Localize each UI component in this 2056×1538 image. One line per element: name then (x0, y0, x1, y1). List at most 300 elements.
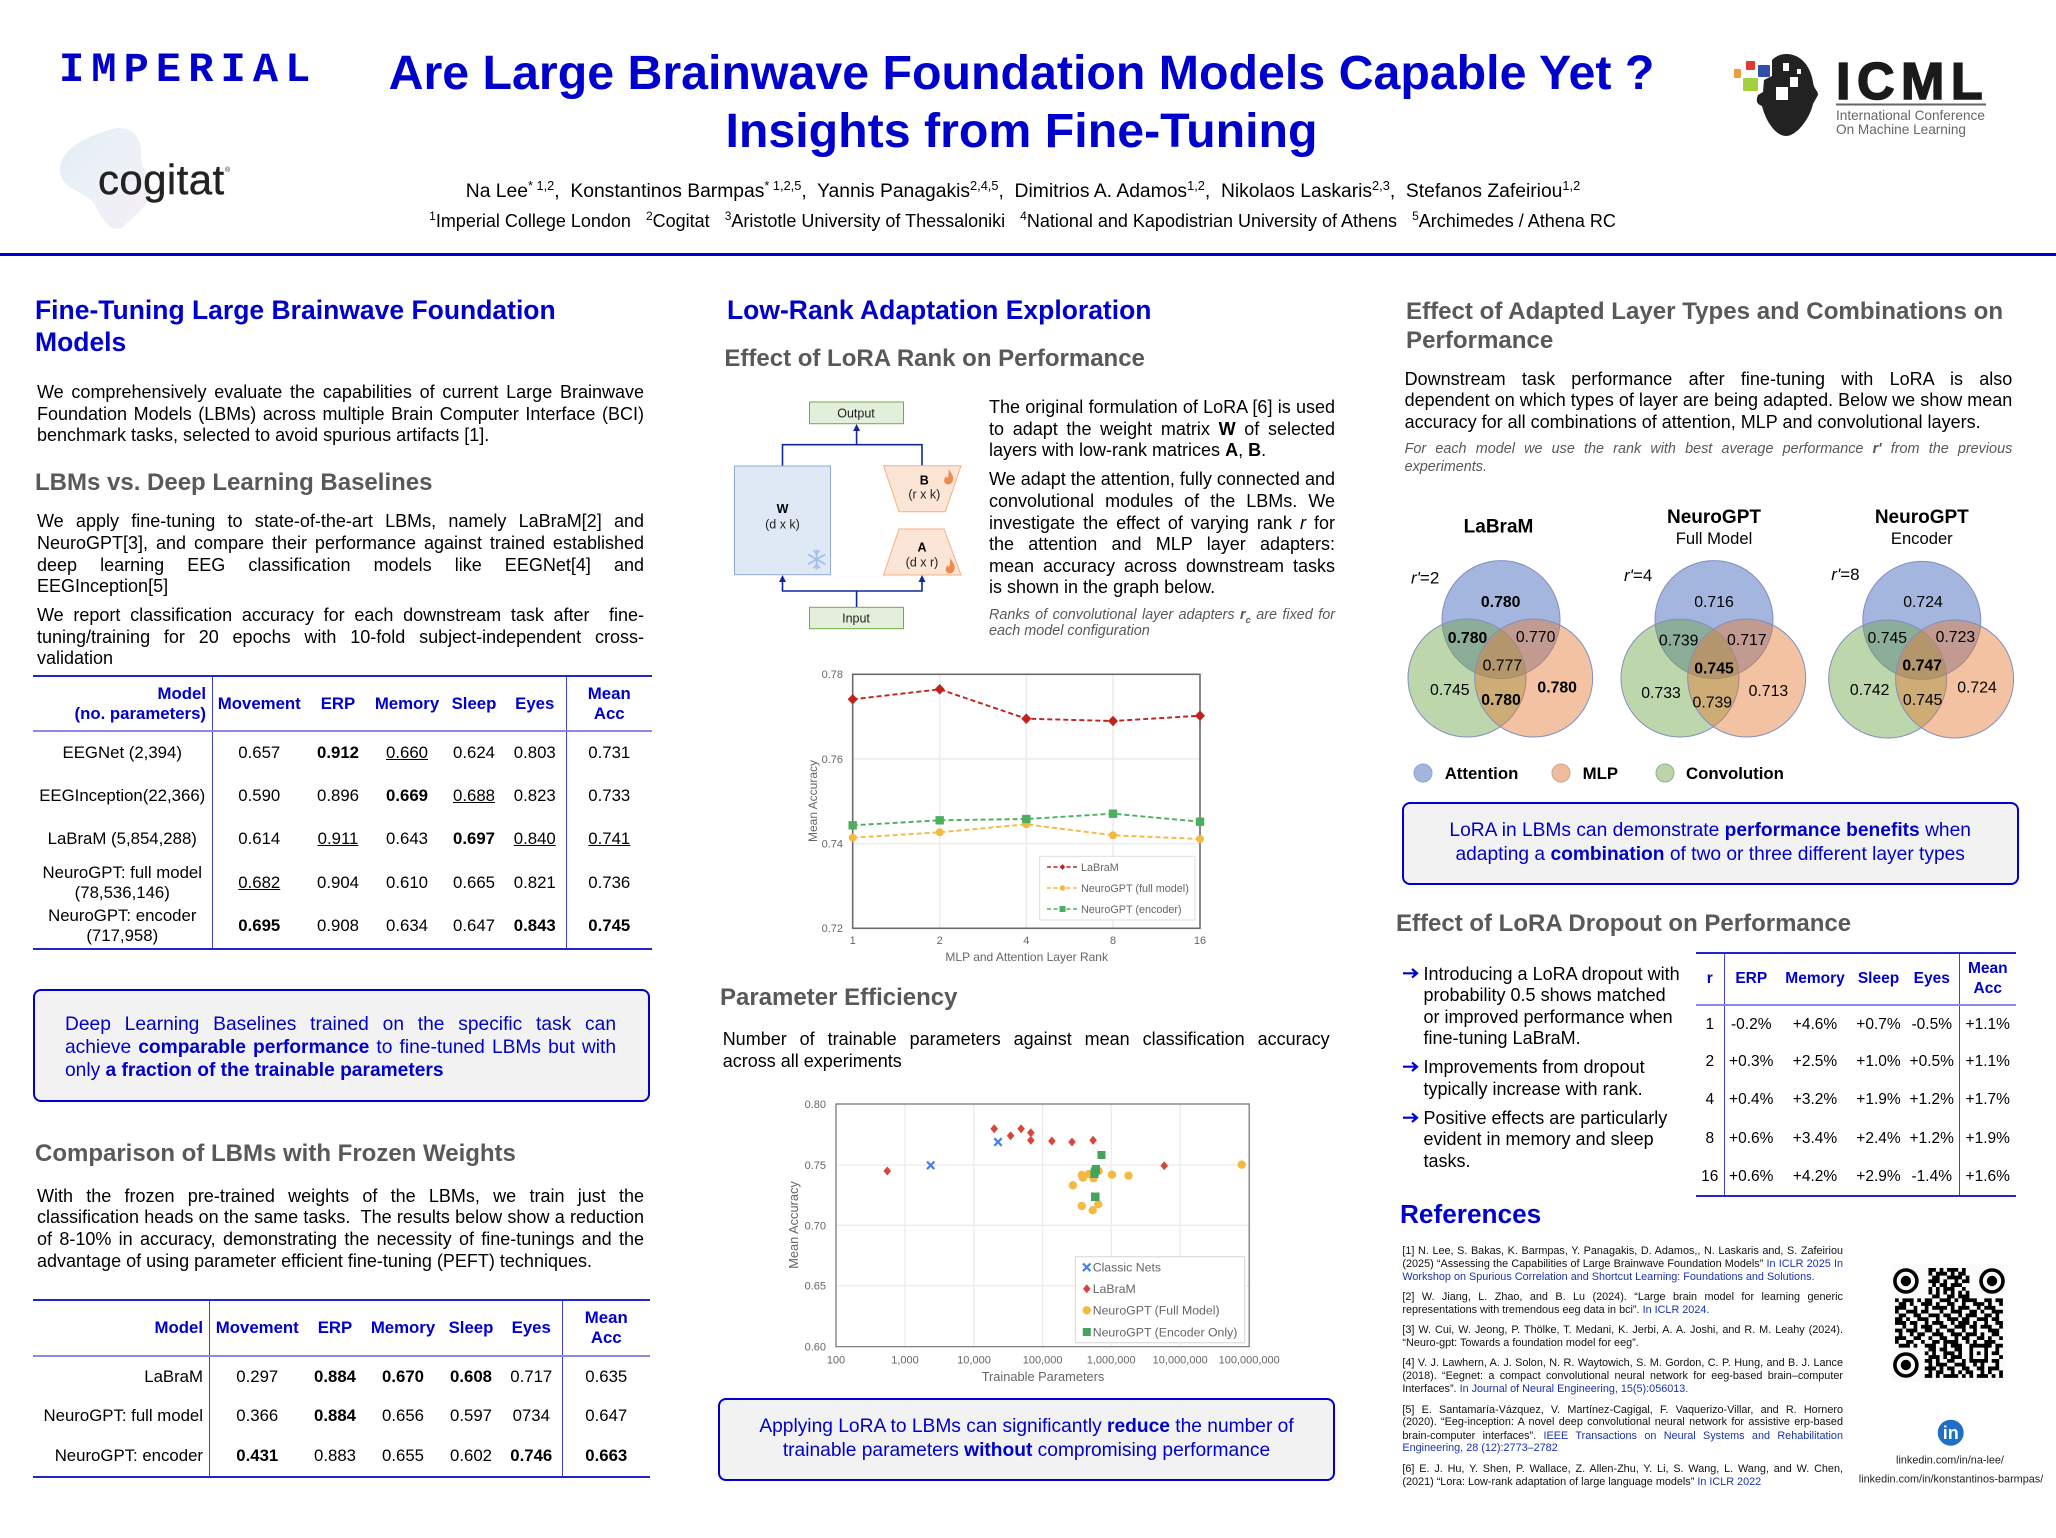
table: frozen weights: Mean (585, 1308, 628, 1327)
table: frozen weights: 0.884 (314, 1406, 356, 1425)
references list: representations with tremendous eeg data in bci”. In ICLR 2024. (1402, 1304, 1709, 1316)
callout: baselines: achieve comparable performance to fine-tuned LBMs but with (65, 1037, 616, 1058)
table: LBMs vs baselines: 0.697 (453, 829, 495, 848)
table: dropout: Sleep (1858, 970, 1899, 987)
table: frozen weights: 0.366 (236, 1406, 278, 1425)
line chart: rank vs accuracy: 2 (937, 935, 943, 947)
venn: LaBraM: 0.780 (1481, 692, 1521, 709)
scatter chart: parameters vs accuracy: 0.80 (805, 1099, 826, 1111)
heading: layer types (1406, 298, 2003, 354)
text: layer types (1405, 369, 2012, 432)
list: dropout findings: Introducing a LoRA dropout with (1424, 964, 1680, 984)
table: LBMs vs baselines: ERP (321, 694, 355, 712)
line chart: rank vs accuracy: 0.78 (822, 669, 843, 681)
text: parameter efficiency (723, 1029, 1330, 1071)
table: frozen weights: Acc (591, 1328, 622, 1347)
heading: fine-tuning section (35, 295, 556, 357)
table: dropout: +3.4% (1793, 1130, 1837, 1147)
table: frozen weights: 0.431 (236, 1446, 278, 1465)
venn legend: Attention (1445, 764, 1518, 783)
table: LBMs vs baselines: NeuroGPT: full model (42, 863, 202, 882)
logo: Cogitat: ® (225, 166, 231, 174)
text: parameter efficiency: across all experiments (723, 1051, 902, 1071)
table: dropout: +0.6% (1729, 1130, 1773, 1147)
heading: fine-tuning section: Models (35, 327, 126, 357)
references list: Workshop on Spurious Correlation and Shortcut Learning: Foundations and Solutions. (1402, 1271, 1815, 1283)
table: LBMs vs baselines: 0.745 (588, 916, 630, 935)
venn: NeuroGPT full model: NeuroGPT (1667, 507, 1761, 528)
table: frozen weights: 0.717 (510, 1367, 552, 1386)
icon: LinkedIn (1938, 1420, 1964, 1446)
scatter chart: parameters vs accuracy: LaBraM (1093, 1282, 1136, 1296)
table: LBMs vs baselines: 0.665 (453, 873, 495, 892)
table: frozen weights: Memory (371, 1318, 435, 1337)
table: frozen weights: NeuroGPT: encoder (55, 1446, 203, 1465)
scatter chart: parameters vs accuracy: 100 (827, 1354, 845, 1366)
logo: ICML: ICML (1836, 53, 1989, 111)
text: fine-tuning description: EEGInception[5] (37, 576, 168, 596)
note: convolutional ranks (989, 607, 1336, 639)
diagram: LoRA architecture: B (920, 474, 929, 488)
diagram: LoRA architecture: (d x k) (765, 518, 800, 532)
text: layer types: Downstream task performance after fine-tuning with LoRA is also (1405, 369, 2012, 389)
heading: fine-tuning section: Fine-Tuning Large Brainwave Foundation (35, 295, 556, 325)
table: dropout: -0.2% (1731, 1016, 1772, 1033)
scatter chart: parameters vs accuracy: 0.65 (805, 1281, 826, 1293)
venn: LaBraM: 0.777 (1483, 658, 1522, 675)
line chart: rank vs accuracy: 16 (1194, 935, 1206, 947)
table: frozen weights: 0.883 (314, 1446, 356, 1465)
table: frozen weights: 0.597 (450, 1406, 492, 1425)
list: dropout findings: fine-tuning LaBraM. (1424, 1028, 1581, 1048)
table: dropout: +1.2% (1910, 1091, 1954, 1108)
venn: NeuroGPT encoder: 0.723 (1936, 629, 1975, 646)
scatter chart: parameters vs accuracy: 10,000 (957, 1354, 991, 1366)
table: LBMs vs baselines: 0.843 (514, 916, 556, 935)
table: frozen weights: 0734 (513, 1406, 550, 1425)
table: dropout: +0.4% (1729, 1091, 1773, 1108)
table: frozen weights: LaBraM (144, 1367, 203, 1386)
table: dropout: +2.9% (1856, 1168, 1901, 1185)
table: LBMs vs baselines: (no. parameters) (74, 704, 206, 722)
callout: baselines: Deep Learning Baselines trained on the specific task can (65, 1014, 616, 1035)
table: frozen weights: 0.297 (236, 1367, 278, 1386)
table: dropout: +0.3% (1729, 1053, 1773, 1070)
diagram: LoRA architecture: W (777, 502, 789, 516)
text: fine-tuning description: deep learning EEG classification models like EEGNet[4] and (37, 555, 644, 575)
logo: Cogitat: cogitat (98, 156, 225, 203)
table: LBMs vs baselines: (717,958) (86, 926, 158, 945)
note: rank r': experiments. (1405, 459, 1487, 475)
venn: LaBraM: 0.780 (1481, 594, 1521, 611)
heading: dropout: Effect of LoRA Dropout on Performance (1396, 910, 1851, 937)
table: LBMs vs baselines: EEGNet (2,394) (63, 743, 182, 762)
references list: brain-computer interfaces”. IEEE Transactions on Neural Systems and Rehabilitation (1402, 1430, 1843, 1442)
text: LoRA description: mean accuracy across downstream tasks (989, 556, 1335, 576)
table: dropout: -1.4% (1912, 1168, 1952, 1185)
table: LBMs vs baselines: (78,536,146) (75, 883, 170, 902)
table: dropout: 4 (1705, 1091, 1714, 1108)
table: LBMs vs baselines: 0.643 (386, 829, 428, 848)
line chart: rank vs accuracy: Mean Accuracy (806, 760, 820, 842)
table: LBMs vs baselines: 0.682 (238, 873, 280, 892)
callout: LoRA reduces parameters: Applying LoRA to LBMs can significantly reduce the number of (759, 1416, 1294, 1437)
table: LBMs vs baselines: Model (158, 684, 206, 702)
LinkedIn links: linkedin.com/in/na-lee/ (1896, 1454, 2005, 1466)
table: dropout: +0.7% (1856, 1016, 1901, 1033)
scatter chart: parameters vs accuracy: 10,000,000 (1153, 1354, 1208, 1366)
heading: low-rank adaptation: Low-Rank Adaptation Exploration (727, 295, 1152, 325)
table: frozen weights: Sleep (449, 1318, 493, 1337)
table: dropout: +0.6% (1729, 1168, 1773, 1185)
callout: combination benefits: LoRA in LBMs can demonstrate performance benefits when (1449, 820, 1971, 841)
venn: LaBraM: 0.745 (1430, 682, 1470, 699)
table: LBMs vs baselines: NeuroGPT: encoder (48, 906, 196, 925)
callout: LoRA reduces parameters (718, 1398, 1335, 1481)
venn: NeuroGPT encoder (1829, 507, 2014, 738)
venn: NeuroGPT encoder: 0.745 (1868, 630, 1907, 647)
list: dropout findings: or improved performance when (1424, 1007, 1673, 1027)
table: frozen weights: 0.647 (585, 1406, 627, 1425)
table: dropout: +1.1% (1966, 1016, 2010, 1033)
note: rank r' (1405, 441, 2012, 475)
references list: (2018). “Eegnet: a compact convolutional neural network for eeg-based brain–computer (1402, 1370, 1843, 1382)
scatter chart: parameters vs accuracy: 1,000 (891, 1354, 919, 1366)
text: LoRA description: We adapt the attention, fully connected and (989, 469, 1335, 489)
QR code (1892, 1264, 2007, 1382)
logo: ICML: On Machine Learning (1836, 122, 1966, 137)
table: dropout: Mean (1968, 960, 2008, 977)
venn: NeuroGPT encoder: 0.745 (1903, 692, 1943, 709)
table: LBMs vs baselines: 0.660 (386, 743, 428, 762)
text: fine-tuning description: We apply fine-tuning to state-of-the-art LBMs, namely LaBraM[2] and (37, 511, 644, 531)
table: frozen weights: 0.670 (382, 1367, 424, 1386)
table: dropout: +1.7% (1966, 1091, 2010, 1108)
list: dropout findings: tasks. (1424, 1151, 1471, 1171)
text: intro (37, 382, 644, 445)
table: LBMs vs baselines: Mean (588, 684, 631, 702)
table: LBMs vs baselines: 0.908 (317, 916, 359, 935)
venn: NeuroGPT encoder: 0.724 (1957, 680, 1997, 697)
scatter chart: parameters vs accuracy: 0.75 (805, 1160, 826, 1172)
table: LBMs vs baselines: 0.741 (588, 829, 630, 848)
text: fine-tuning description: validation (37, 648, 113, 668)
table: LBMs vs baselines: 0.736 (588, 873, 630, 892)
venn: NeuroGPT encoder: r'=8 (1831, 565, 1860, 584)
authors: Na Lee* 1,2, Konstantinos Barmpas* 1,2,5, Yannis Panagakis2,4,5, Dimitrios A. Adamos1,2, Nikolaos Laskaris2,3, Stefanos Zafeiriou1,2 (466, 178, 1580, 202)
heading: references: References (1400, 1199, 1541, 1229)
table: LBMs vs baselines: 0.647 (453, 916, 495, 935)
table: LBMs vs baselines: 0.896 (317, 786, 359, 805)
line chart: rank vs accuracy: 1 (850, 935, 856, 947)
LinkedIn links (1859, 1454, 2044, 1485)
table: LBMs vs baselines: 0.657 (238, 743, 280, 762)
text: fine-tuning description: NeuroGPT[3], and compare their performance against trained established (37, 533, 644, 553)
table: frozen weights: 0.635 (585, 1367, 627, 1386)
table: LBMs vs baselines: 0.731 (588, 743, 630, 762)
title (389, 46, 1654, 158)
references list: Interfaces”. In Journal of Neural Engineering, 15(5):056013. (1402, 1383, 1688, 1395)
line chart: rank vs accuracy: 8 (1110, 935, 1116, 947)
callout: LoRA reduces parameters: trainable parameters without compromising performance (783, 1440, 1270, 1461)
table: LBMs vs baselines: 0.733 (588, 786, 630, 805)
table: dropout: ERP (1735, 970, 1767, 987)
table: dropout: +4.2% (1793, 1168, 1837, 1185)
icon: LinkedIn: in (1943, 1423, 1959, 1443)
venn: NeuroGPT encoder: NeuroGPT (1875, 507, 1969, 528)
text: intro: benchmark tasks, selected to avoid spurious artifacts [1]. (37, 425, 489, 445)
line chart: rank vs accuracy: MLP and Attention Layer Rank (945, 950, 1109, 964)
table: dropout: Memory (1785, 970, 1845, 987)
line chart: rank vs accuracy: LaBraM (1081, 862, 1119, 874)
venn: NeuroGPT full model: 0.713 (1749, 683, 1788, 700)
venn legend: MLP (1583, 764, 1618, 783)
venn: NeuroGPT full model: 0.717 (1727, 632, 1767, 649)
references list: [5] E. Santamaría-Vázquez, V. Martínez-Cagigal, F. Vaquerizo-Villar, and R. Hornero (1402, 1404, 1843, 1416)
venn: LaBraM: LaBraM (1464, 516, 1533, 538)
line chart: rank vs accuracy: 0.72 (822, 923, 843, 935)
line chart: rank vs accuracy: 4 (1023, 935, 1029, 947)
table: frozen weights: ERP (318, 1318, 352, 1337)
scatter chart: parameters vs accuracy: NeuroGPT (Full Model) (1093, 1304, 1220, 1318)
venn: LaBraM: 0.780 (1537, 680, 1577, 697)
text: frozen weights: advantage of using parameter efficient fine-tuning (PEFT) techniques. (37, 1251, 592, 1271)
heading: LBMs vs baselines: LBMs vs. Deep Learning Baselines (35, 469, 432, 496)
references list: (2021) “Lora: Low-rank adaptation of large language models” In ICLR 2022 (1402, 1476, 1761, 1488)
list: dropout findings: evident in memory and sleep (1424, 1129, 1654, 1149)
diagram: LoRA architecture: (r x k) (908, 488, 940, 502)
references list: (2025) “Assessing the Capabilities of Large Brainwave Foundation Models” In ICLR 2025 In (1402, 1258, 1843, 1270)
table: frozen weights: 0.608 (450, 1367, 492, 1386)
logo: ICML (1734, 53, 1989, 137)
scatter chart: parameters vs accuracy: 1,000,000 (1087, 1354, 1136, 1366)
table: frozen weights: NeuroGPT: full model (44, 1406, 203, 1425)
affiliations: 1Imperial College London 2Cogitat 3Aristotle University of Thessaloniki 4National and Kapodistrian University of Athens 5Archimedes / Athena RC (429, 209, 1616, 230)
diagram: LoRA architecture: Input (842, 612, 870, 626)
table: LBMs vs baselines: EEGInception(22,366) (39, 786, 205, 805)
references list: [3] W. Cui, W. Jeong, P. Thölke, T. Medani, K. Jerbi, A. A. Joshi, and R. M. Leahy (2024). (1402, 1324, 1843, 1336)
venn: NeuroGPT encoder: 0.724 (1903, 594, 1943, 611)
venn: NeuroGPT full model: Full Model (1676, 529, 1752, 548)
references list: [2] W. Jiang, L. Zhao, and B. Lu (2024). “Large brain model for learning generic (1402, 1291, 1843, 1303)
table: LBMs vs baselines: Eyes (515, 694, 554, 712)
venn: NeuroGPT encoder: 0.742 (1850, 682, 1889, 699)
line chart: rank vs accuracy: NeuroGPT (encoder) (1081, 904, 1182, 916)
diagram: LoRA architecture (734, 402, 961, 629)
callout: baselines (33, 989, 650, 1102)
list: dropout findings: Improvements from dropout (1424, 1057, 1645, 1077)
venn: NeuroGPT full model: 0.739 (1693, 695, 1732, 712)
table: LBMs vs baselines: 0.911 (318, 829, 358, 848)
list: dropout findings (1424, 964, 1680, 1171)
table: LBMs vs baselines: 0.803 (514, 743, 556, 762)
text: LoRA description: to adapt the weight matrix W of selected (989, 419, 1335, 439)
table: frozen weights: Movement (216, 1318, 299, 1337)
scatter chart: parameters vs accuracy: NeuroGPT (Encoder Only) (1093, 1325, 1237, 1339)
venn: NeuroGPT full model: r'=4 (1624, 566, 1652, 585)
logo: Cogitat (60, 128, 231, 229)
venn: NeuroGPT full model: 0.733 (1641, 685, 1681, 702)
text: intro: Foundation Models (LBMs) across multiple Brain Computer Interface (BCI) (37, 404, 644, 424)
note: convolutional ranks: Ranks of convolutional layer adapters rc are fixed for (989, 607, 1335, 626)
table: dropout: +1.2% (1910, 1130, 1954, 1147)
scatter chart: parameters vs accuracy: 0.60 (805, 1342, 826, 1354)
callout: combination benefits (1402, 802, 2019, 885)
text: LoRA description: The original formulation of LoRA [6] is used (989, 397, 1335, 417)
table: dropout: +2.4% (1856, 1130, 1901, 1147)
table: LBMs vs baselines: 0.904 (317, 873, 359, 892)
venn: LaBraM: 0.770 (1516, 629, 1556, 646)
references list: [4] V. J. Lawhern, A. J. Solon, N. R. Waytowich, S. M. Gordon, C. P. Hung, and B. J. Lance (1402, 1357, 1843, 1369)
venn: LaBraM: 0.780 (1448, 630, 1487, 647)
table: dropout: Acc (1974, 980, 2002, 997)
references list: Engineering, 28 (12):2773–2782 (1402, 1442, 1558, 1454)
callout: baselines: only a fraction of the trainable parameters (65, 1060, 444, 1081)
text: layer types: dependent on which types of layer are being adapted. Below we show mean (1405, 390, 2012, 410)
table: LBMs vs baselines: 0.823 (514, 786, 556, 805)
table: dropout: +3.2% (1793, 1091, 1837, 1108)
table: dropout: +1.0% (1856, 1053, 1901, 1070)
table: LBMs vs baselines: Acc (594, 704, 625, 722)
table: frozen weights (33, 1299, 650, 1478)
venn: LaBraM (1408, 516, 1593, 737)
table: dropout: -0.5% (1912, 1016, 1952, 1033)
scatter chart: parameters vs accuracy: Trainable Parameters (982, 1369, 1104, 1384)
scatter chart: parameters vs accuracy: 100,000,000 (1219, 1354, 1280, 1366)
table: frozen weights: 0.663 (585, 1446, 627, 1465)
text: parameter efficiency: Number of trainable parameters against mean classification accuracy (723, 1029, 1330, 1049)
note: rank r': For each model we use the rank with best average performance r' from the previous (1405, 441, 2012, 457)
venn: NeuroGPT full model (1621, 507, 1806, 737)
table: LBMs vs baselines: Movement (218, 694, 301, 712)
heading: layer types: Effect of Adapted Layer Types and Combinations on (1406, 298, 2003, 324)
table: LBMs vs baselines: 0.912 (317, 743, 359, 762)
text: fine-tuning description: tuning/training for 20 epochs with 10-fold subject-independent cross- (37, 627, 644, 647)
table: LBMs vs baselines: 0.688 (453, 786, 495, 805)
venn: NeuroGPT encoder: Encoder (1891, 529, 1953, 548)
list: dropout findings: typically increase with rank. (1424, 1079, 1643, 1099)
scatter chart: parameters vs accuracy: Mean Accuracy (786, 1181, 801, 1269)
text: frozen weights: classification heads on the same tasks. The results below show a reduction (37, 1207, 644, 1227)
title: Insights from Fine-Tuning (725, 104, 1318, 158)
venn: NeuroGPT full model: 0.739 (1659, 633, 1699, 650)
venn: NeuroGPT full model: 0.716 (1694, 594, 1734, 611)
table: LBMs vs baselines: 0.610 (386, 873, 428, 892)
references list (1402, 1245, 1843, 1488)
line chart: rank vs accuracy (806, 669, 1206, 964)
table: dropout: 1 (1705, 1016, 1714, 1033)
text: LoRA description (989, 397, 1335, 597)
callout: combination benefits: adapting a combination of two or three different layer types (1455, 844, 1965, 865)
diagram: LoRA architecture: A (917, 540, 927, 554)
table: dropout: Eyes (1914, 970, 1950, 987)
table: frozen weights: 0.656 (382, 1406, 424, 1425)
table: dropout: +1.6% (1966, 1168, 2010, 1185)
references list: “Neuro-gpt: Towards a foundation model for eeg”. (1402, 1337, 1639, 1349)
table: dropout: 16 (1701, 1168, 1718, 1185)
references list: [1] N. Lee, S. Bakas, K. Barmpas, Y. Panagakis, D. Adamos,, N. Laskaris and, S. Zafeiriou (1402, 1245, 1843, 1257)
text: layer types: accuracy for all combinations of attention, MLP and convolutional layers. (1405, 412, 1981, 432)
references list: [6] E. J. Hu, Y. Shen, P. Wallace, Z. Allen-Zhu, Y. Li, S. Wang, L. Wang, and W. Chen, (1402, 1463, 1843, 1475)
text: LoRA description: investigate the effect of varying rank r for (989, 513, 1335, 533)
text: LoRA description: is shown in the graph below. (989, 577, 1215, 597)
table: dropout: 2 (1705, 1053, 1714, 1070)
text: intro: We comprehensively evaluate the capabilities of current Large Brainwave (37, 382, 644, 402)
scatter chart: parameters vs accuracy: 0.70 (805, 1220, 826, 1232)
table: dropout: +0.5% (1910, 1053, 1954, 1070)
text: LoRA description: the attention and MLP layer adapters: (989, 534, 1335, 554)
text: frozen weights (37, 1186, 644, 1271)
table: dropout: 8 (1705, 1130, 1714, 1147)
table: LBMs vs baselines: 0.590 (238, 786, 280, 805)
line chart: rank vs accuracy: 0.74 (822, 839, 843, 851)
venn: NeuroGPT full model: 0.745 (1694, 661, 1734, 678)
scatter chart: parameters vs accuracy: 100,000 (1023, 1354, 1062, 1366)
table: LBMs vs baselines: 0.614 (238, 829, 280, 848)
icons: bullet arrows (1403, 969, 1417, 1122)
diagram: LoRA architecture: (d x r) (906, 556, 938, 570)
scatter chart: parameters vs accuracy (786, 1099, 1280, 1384)
venn: LaBraM: r'=2 (1411, 568, 1439, 588)
table: LBMs vs baselines: Sleep (452, 694, 496, 712)
list: dropout findings: Positive effects are particularly (1424, 1108, 1667, 1128)
table: dropout: +1.9% (1856, 1091, 1901, 1108)
logo: Imperial: IMPERIAL (59, 46, 317, 94)
line chart: rank vs accuracy: 0.76 (822, 754, 843, 766)
table: dropout: +2.5% (1793, 1053, 1837, 1070)
text: fine-tuning description (37, 511, 644, 668)
title: Are Large Brainwave Foundation Models Capable Yet ? (389, 46, 1654, 100)
text: LoRA description: convolutional modules of the LBMs. We (989, 491, 1335, 511)
table: LBMs vs baselines: 0.840 (514, 829, 556, 848)
LinkedIn links: linkedin.com/in/konstantinos-barmpas/ (1859, 1473, 2044, 1485)
table: frozen weights: 0.602 (450, 1446, 492, 1465)
heading: layer types: Performance (1406, 327, 1553, 354)
text: frozen weights: With the frozen pre-trained weights of the LBMs, we train just the (37, 1186, 644, 1206)
diagram: LoRA architecture: Output (837, 406, 875, 420)
venn legend (1414, 764, 1784, 783)
table: dropout: r (1707, 970, 1713, 987)
table: LBMs vs baselines (33, 675, 652, 950)
text: LoRA description: layers with low-rank matrices A, B. (989, 440, 1266, 460)
table: frozen weights: 0.746 (510, 1446, 552, 1465)
table: LBMs vs baselines: 0.821 (514, 873, 556, 892)
table: dropout: +1.9% (1966, 1130, 2010, 1147)
line chart: rank vs accuracy: NeuroGPT (full model) (1081, 883, 1189, 895)
heading: frozen weights: Comparison of LBMs with Frozen Weights (35, 1140, 516, 1167)
table: LBMs vs baselines: 0.669 (386, 786, 428, 805)
table: LBMs vs baselines: 0.634 (386, 916, 428, 935)
table: LBMs vs baselines: 0.624 (453, 743, 495, 762)
text: fine-tuning description: We report classification accuracy for each downstream task after fine- (37, 605, 644, 625)
references list: (2020). “Eeg-inception: A novel deep convolutional neural network for assistive erp-based (1402, 1416, 1843, 1428)
note: convolutional ranks: each model configuration (989, 623, 1150, 639)
list: dropout findings: probability 0.5 shows matched (1424, 985, 1666, 1005)
table: LBMs vs baselines: LaBraM (5,854,288) (48, 829, 197, 848)
table: frozen weights: 0.884 (314, 1367, 356, 1386)
heading: LoRA rank effect: Effect of LoRA Rank on Performance (724, 345, 1145, 372)
heading: parameter efficiency: Parameter Efficiency (720, 984, 957, 1010)
logo: ICML: International Conference (1836, 108, 1985, 123)
text: frozen weights: of 8-10% in accuracy, demonstrating the necessity of fine-tunings and the (37, 1229, 644, 1249)
table: frozen weights: Eyes (512, 1318, 551, 1337)
venn: NeuroGPT encoder: 0.747 (1902, 658, 1942, 675)
table: dropout: +4.6% (1793, 1016, 1837, 1033)
table: LBMs vs baselines: Memory (375, 694, 439, 712)
scatter chart: parameters vs accuracy: Classic Nets (1093, 1261, 1161, 1275)
table: LBMs vs baselines: 0.695 (238, 916, 280, 935)
table: dropout (1696, 952, 2016, 1197)
